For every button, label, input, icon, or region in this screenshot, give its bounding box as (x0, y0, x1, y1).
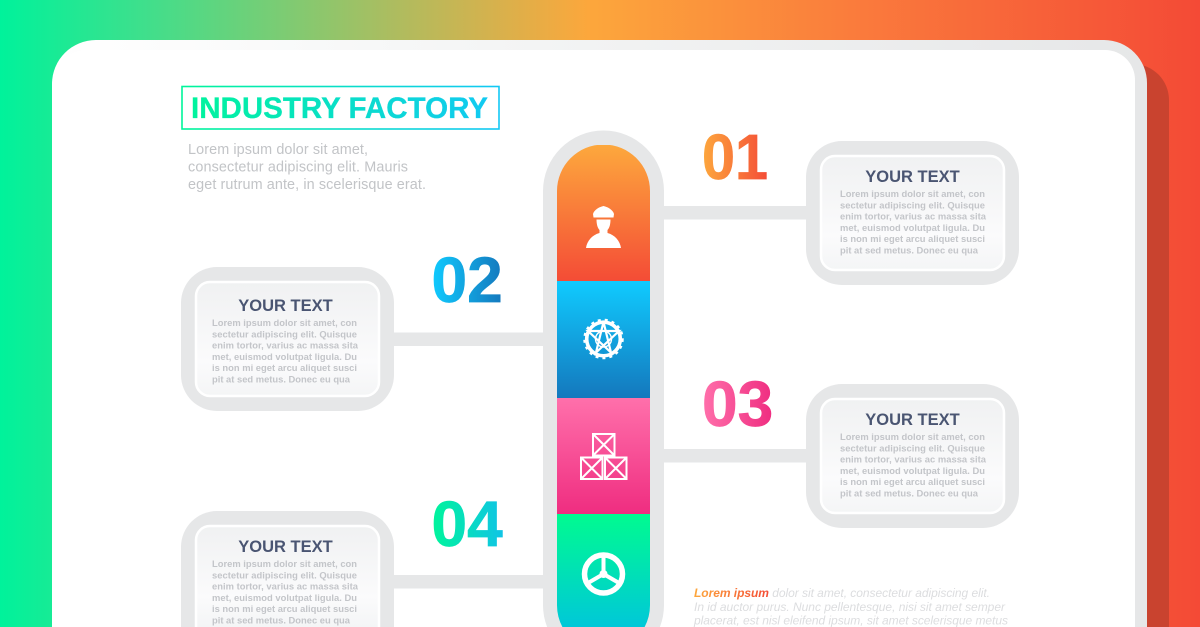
number 01: 01 (702, 121, 768, 193)
text box 04: met, euismod volutpat ligula. Du (212, 592, 357, 603)
connector lines (390, 206, 810, 588)
text box 03: enim tortor, varius ac massa sita (840, 454, 987, 465)
text box 02: sectetur adipiscing elit. Quisque (212, 328, 357, 339)
text box 02: is non mi eget arcu aliquet susci (212, 362, 357, 373)
text box 03: pit at sed metus. Donec eu qua (840, 488, 979, 498)
text box 01: met, euismod volutpat ligula. Du (840, 222, 985, 233)
text box 01: enim tortor, varius ac massa sita (840, 211, 987, 222)
icon: crates (581, 434, 626, 479)
text box 03: sectetur adipiscing elit. Quisque (840, 442, 985, 453)
text box 04: sectetur adipiscing elit. Quisque (212, 569, 357, 580)
text box 04: YOUR TEXT (238, 538, 333, 556)
text box 03: is non mi eget arcu aliquet susci (840, 476, 985, 487)
text box 04: enim tortor, varius ac massa sita (212, 581, 359, 592)
text box 03: YOUR TEXT (865, 411, 960, 429)
text box 02 (181, 267, 394, 411)
text box 02: YOUR TEXT (238, 297, 333, 315)
text box 01 (806, 141, 1019, 285)
number 02: 02 (432, 244, 503, 316)
icon: gear (584, 320, 622, 358)
text box 01: pit at sed metus. Donec eu qua (840, 244, 979, 256)
text box 02: enim tortor, varius ac massa sita (212, 340, 359, 351)
text box 02: met, euismod volutpat ligula. Du (212, 351, 357, 362)
icon: worker (586, 206, 621, 248)
text box 02: Lorem ipsum dolor sit amet, con (212, 317, 357, 328)
text box 01: sectetur adipiscing elit. Quisque (840, 199, 985, 210)
footer note: In id auctor purus. Nunc pellentesque, nisi sit amet semper (694, 600, 1006, 614)
title: INDUSTRY FACTORY (191, 92, 488, 125)
text box 04: is non mi eget arcu aliquet susci (212, 603, 357, 614)
text box 03: met, euismod volutpat ligula. Du (840, 465, 985, 476)
number 03: 03 (702, 368, 773, 440)
footer note: Lorem ipsum dolor sit amet, consectetur adipiscing elit. (694, 586, 990, 600)
intro text: Lorem ipsum dolor sit amet, (188, 142, 368, 158)
text box 01: Lorem ipsum dolor sit amet, con (840, 188, 985, 199)
text box 01: YOUR TEXT (865, 168, 960, 186)
text box 04 (181, 511, 394, 627)
icon: steering wheel (584, 555, 622, 593)
intro text: consectetur adipiscing elit. Mauris (188, 160, 408, 176)
central pill timeline (543, 130, 664, 627)
text box 02: pit at sed metus. Donec eu qua (212, 374, 351, 384)
number 04: 04 (432, 488, 503, 560)
text box 01: is non mi eget arcu aliquet susci (840, 233, 985, 244)
text box 03: Lorem ipsum dolor sit amet, con (840, 431, 985, 442)
intro text: eget rutrum ante, in scelerisque erat. (188, 177, 426, 193)
text box 04: Lorem ipsum dolor sit amet, con (212, 558, 357, 569)
text box 04: pit at sed metus. Donec eu qua (212, 614, 351, 626)
text box 03 (806, 384, 1019, 528)
